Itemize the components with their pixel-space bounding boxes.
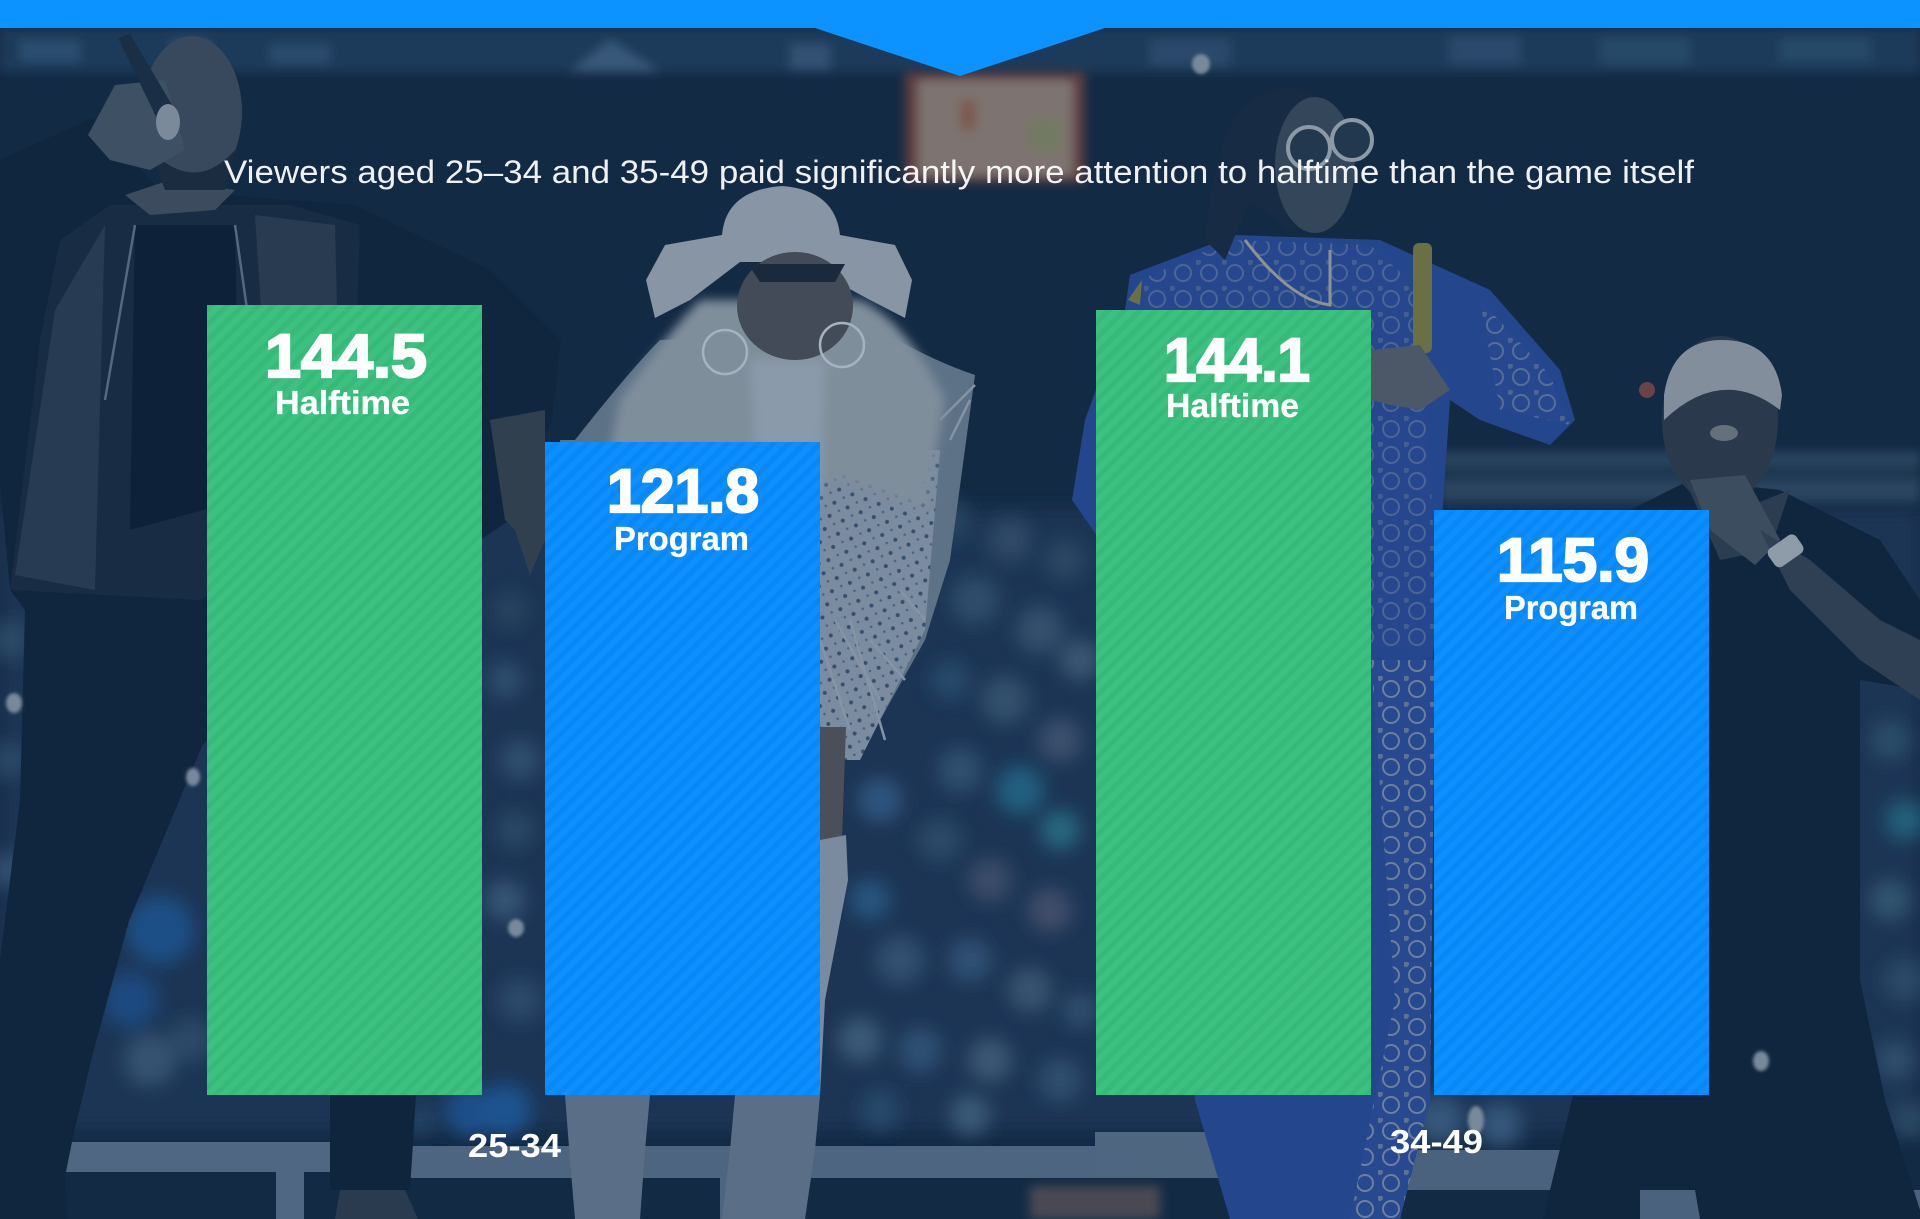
bar: 25-34 halftime (207, 305, 482, 1095)
bar: 25-34 halftime: Halftime (275, 384, 410, 421)
background: upper stands (0, 28, 1920, 72)
bar: 34-49 program (1434, 510, 1709, 1095)
background: far railing (1440, 452, 1920, 502)
bar: 34-49 program: Program (1504, 589, 1638, 626)
axis label: 25-34: 25-34 (468, 1127, 562, 1164)
top banner with centre arrow (0, 0, 1920, 76)
bar group: 25-34 (207, 305, 820, 1164)
bar chart: viewers attention by age group (207, 305, 1709, 1164)
figure: rapper with microphone on the left (0, 34, 561, 1219)
bar: 34-49 program: 115.9 (1497, 526, 1649, 594)
axis label: 34-49: 34-49 (1390, 1123, 1483, 1160)
subtitle: Viewers aged 25–34 and 35-49 paid significantly more attention to halftime than the game itself (224, 154, 1694, 190)
figure: performer with headband and microphone (1543, 336, 1920, 1219)
bar: 25-34 halftime: 144.5 (265, 322, 427, 390)
background: scoreboard (905, 72, 1085, 182)
bar group: 34-49 (1096, 310, 1709, 1160)
background: crowd (0, 500, 1920, 1147)
bar: 34-49 halftime: 144.1 (1164, 326, 1310, 394)
bar: 25-34 program: Program (614, 520, 749, 557)
background: foreground stage rail (66, 1132, 1920, 1219)
bar: 34-49 halftime: Halftime (1166, 387, 1299, 424)
figure: performer in white hat and lace outfit (560, 186, 975, 1219)
bar: 25-34 program: 121.8 (607, 457, 759, 525)
bar: 34-49 halftime (1096, 310, 1371, 1095)
bar: 25-34 program (545, 442, 820, 1095)
figure: performer in blue bandana tracksuit (1072, 88, 1575, 1219)
